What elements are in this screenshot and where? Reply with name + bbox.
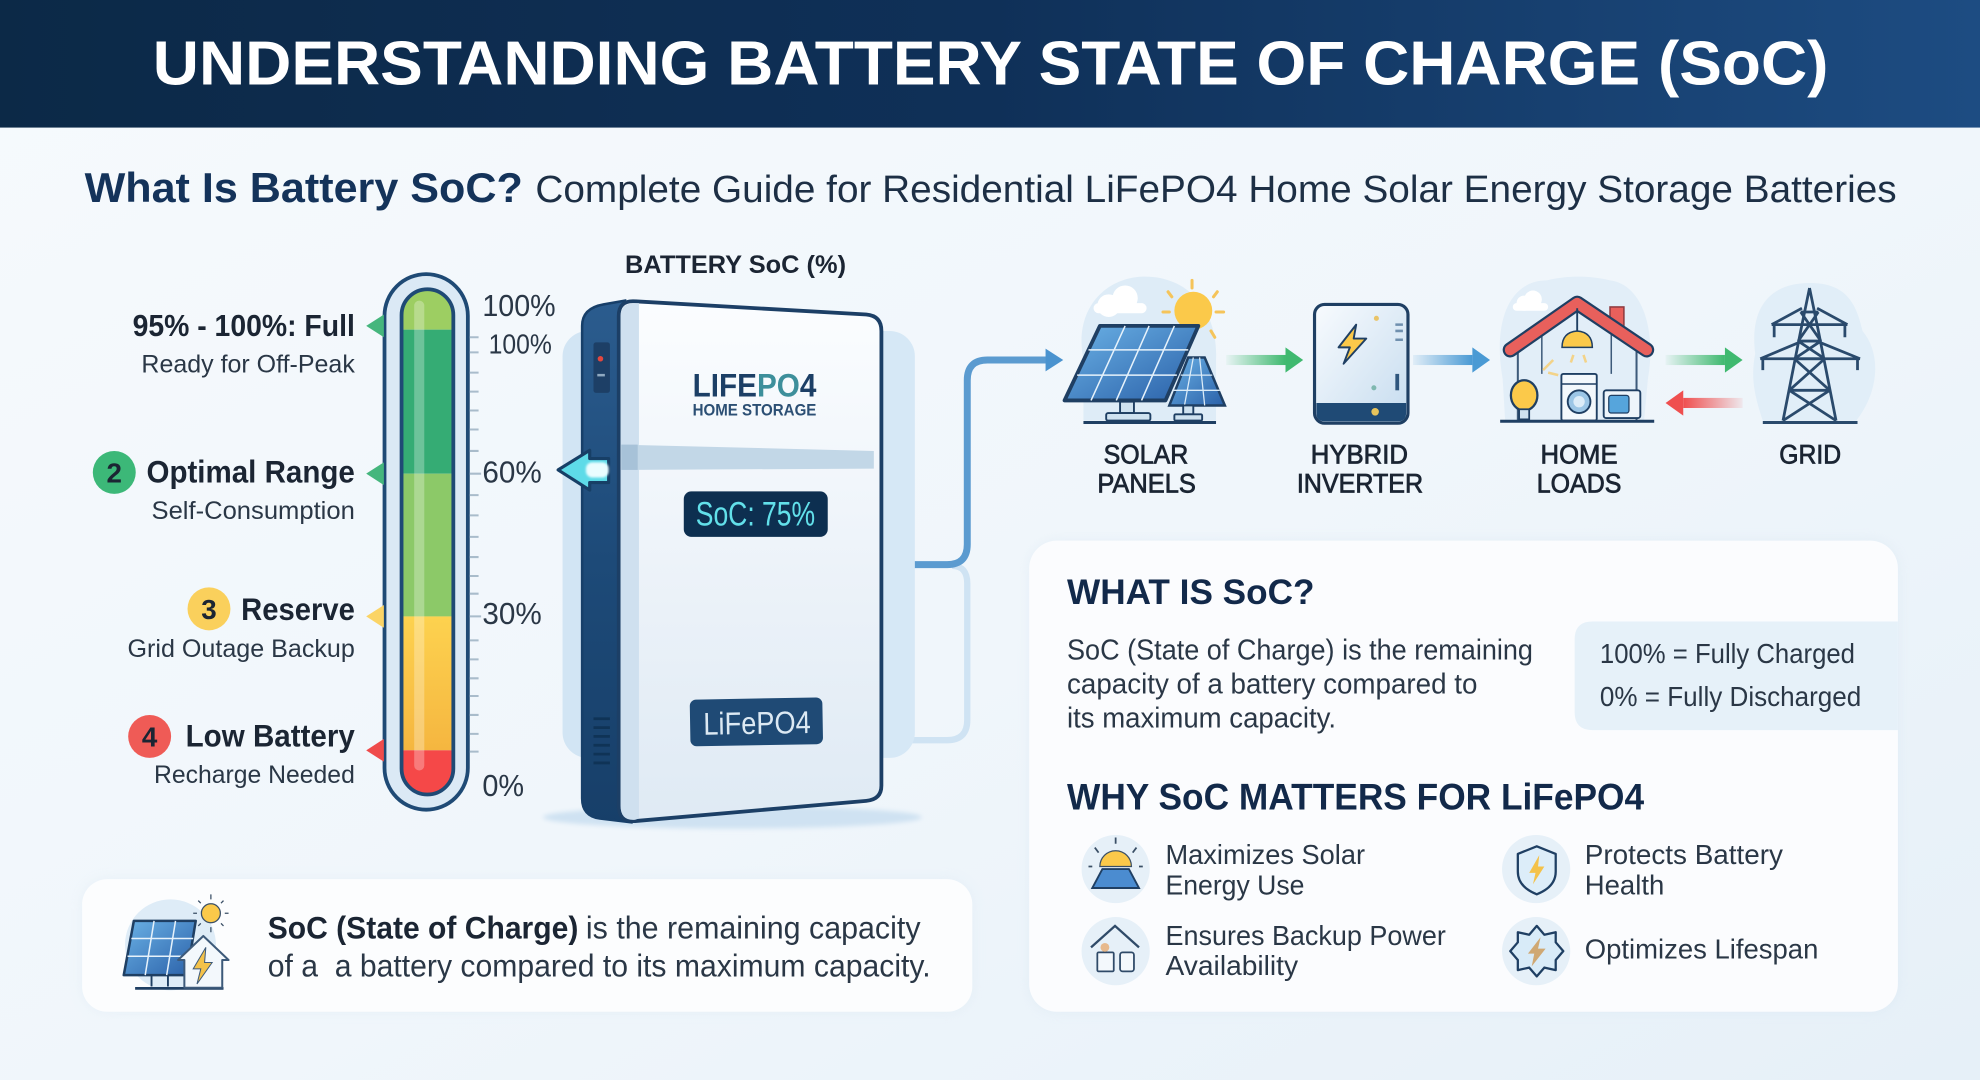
range callout: 0% = Fully Discharged bbox=[1600, 681, 1861, 712]
scale labels: 100% bbox=[482, 290, 556, 323]
callout text: is the remaining capacity bbox=[586, 910, 921, 946]
label: solar panels bbox=[1097, 440, 1196, 499]
definition text: capacity of a battery compared to bbox=[1067, 668, 1477, 700]
zone marker: full bbox=[366, 315, 384, 337]
battery pointer arrow bbox=[558, 450, 609, 490]
scale labels: 60% bbox=[482, 457, 542, 490]
arrow: inverter to home bbox=[1413, 347, 1490, 373]
benefit: battery health: Health bbox=[1585, 869, 1664, 900]
label: low zone: 4 bbox=[142, 722, 158, 753]
label: reserve zone: Grid Outage Backup bbox=[128, 635, 355, 663]
icon: solar panels bbox=[1065, 277, 1225, 423]
scale labels: 100% bbox=[489, 329, 552, 360]
label: home loads bbox=[1537, 440, 1621, 499]
icon: home loads bbox=[1500, 277, 1654, 421]
header banner bbox=[0, 0, 1980, 128]
chemistry plate bbox=[690, 697, 823, 746]
label: home loads: LOADS bbox=[1537, 469, 1621, 499]
label: hybrid inverter: HYBRID bbox=[1311, 440, 1408, 470]
range callout: 100% = Fully Charged bbox=[1600, 638, 1855, 669]
arrow: grid to home bbox=[1666, 390, 1743, 416]
battery front bbox=[619, 301, 881, 821]
label: home loads: HOME bbox=[1541, 440, 1618, 470]
chemistry plate: LiFePO4 bbox=[703, 704, 811, 742]
zone marker: reserve bbox=[366, 605, 384, 628]
battery logo: LIFEPO4 bbox=[693, 367, 817, 404]
battery switch bbox=[593, 342, 610, 393]
benefit: lifespan: Optimizes Lifespan bbox=[1585, 934, 1818, 965]
label: solar panels: PANELS bbox=[1097, 469, 1196, 499]
label: hybrid inverter: INVERTER bbox=[1297, 469, 1423, 499]
label: optimal zone: Self-Consumption bbox=[152, 497, 355, 525]
range callout bbox=[1575, 621, 1898, 730]
zone marker: optimal bbox=[366, 462, 384, 485]
label: reserve zone: Reserve bbox=[241, 591, 355, 627]
battery unit bbox=[543, 301, 922, 829]
scale labels bbox=[482, 290, 556, 803]
arrow: home to grid bbox=[1666, 347, 1743, 373]
panel: SoC thermometer gauge bbox=[385, 274, 556, 810]
heading: why SoC matters: WHY SoC MATTERS FOR LiFePO4 bbox=[1067, 777, 1645, 818]
connector: battery to solar flow bbox=[881, 349, 1063, 740]
callout text bbox=[268, 910, 931, 983]
label: full zone: Ready for Off-Peak bbox=[141, 351, 355, 379]
definition text: its maximum capacity. bbox=[1067, 703, 1336, 735]
battery logo bbox=[693, 367, 817, 420]
battery side bbox=[582, 301, 631, 822]
callout text: of a a battery compared to its maximum capacity. bbox=[268, 947, 931, 983]
benefit: backup power bbox=[1082, 917, 1446, 985]
icon: grid tower bbox=[1753, 283, 1875, 423]
icon: hybrid inverter bbox=[1315, 304, 1408, 423]
heading: what is SoC: WHAT IS SoC? bbox=[1067, 573, 1315, 612]
SoC display: SoC: 75% bbox=[696, 495, 815, 533]
label: hybrid inverter bbox=[1297, 440, 1423, 499]
benefit: backup power: Availability bbox=[1166, 950, 1298, 981]
battery logo: HOME STORAGE bbox=[693, 402, 816, 420]
label: reserve zone bbox=[128, 587, 355, 663]
label: optimal zone: Optimal Range bbox=[146, 454, 355, 490]
label: solar panels: SOLAR bbox=[1104, 440, 1188, 470]
label: grid: GRID bbox=[1779, 440, 1841, 470]
definition text: SoC (State of Charge) is the remaining bbox=[1067, 634, 1533, 666]
label: low zone bbox=[128, 715, 355, 789]
benefit: solar use: Maximizes Solar bbox=[1166, 839, 1365, 870]
benefit: solar use bbox=[1082, 835, 1365, 903]
battery back glow bbox=[563, 331, 915, 758]
label: optimal zone bbox=[93, 451, 355, 525]
label: full zone bbox=[133, 310, 355, 379]
benefit: battery health: Protects Battery bbox=[1585, 839, 1783, 870]
SoC display bbox=[684, 491, 828, 537]
label: optimal zone: 2 bbox=[107, 458, 122, 489]
benefit: backup power: Ensures Backup Power bbox=[1166, 920, 1446, 951]
label: reserve zone: 3 bbox=[201, 594, 217, 625]
icon: solar house bbox=[124, 894, 229, 990]
arrow: solar to inverter bbox=[1226, 347, 1303, 373]
panel: definition callout bbox=[82, 879, 972, 1012]
title: UNDERSTANDING BATTERY STATE OF CHARGE (SoC) bbox=[153, 30, 1828, 99]
zone marker: low bbox=[366, 739, 384, 762]
subtitle: What Is Battery SoC? bbox=[85, 164, 523, 211]
battery floor shadow bbox=[543, 806, 922, 829]
panel: what is SoC bbox=[1029, 541, 1898, 1012]
benefit: battery health bbox=[1502, 835, 1783, 903]
gauge tick marks bbox=[470, 337, 481, 752]
label: full zone: 95% - 100%: Full bbox=[133, 310, 355, 343]
callout text: SoC (State of Charge) bbox=[268, 910, 578, 946]
gauge outer tube bbox=[385, 274, 468, 810]
benefit: lifespan bbox=[1502, 917, 1818, 985]
battery heading: BATTERY SoC (%) bbox=[625, 251, 846, 279]
gauge inner fill zones bbox=[402, 289, 453, 796]
benefit: solar use: Energy Use bbox=[1166, 869, 1304, 900]
subtitle bbox=[85, 164, 1897, 211]
label: low zone: Low Battery bbox=[186, 718, 355, 754]
scale labels: 30% bbox=[482, 598, 542, 631]
scale labels: 0% bbox=[482, 770, 524, 803]
definition text bbox=[1067, 634, 1533, 735]
battery vents bbox=[593, 719, 610, 763]
label: low zone: Recharge Needed bbox=[154, 761, 355, 789]
subtitle: Complete Guide for Residential LiFePO4 Home Solar Energy Storage Batteries bbox=[535, 169, 1897, 211]
battery band bbox=[621, 445, 874, 470]
